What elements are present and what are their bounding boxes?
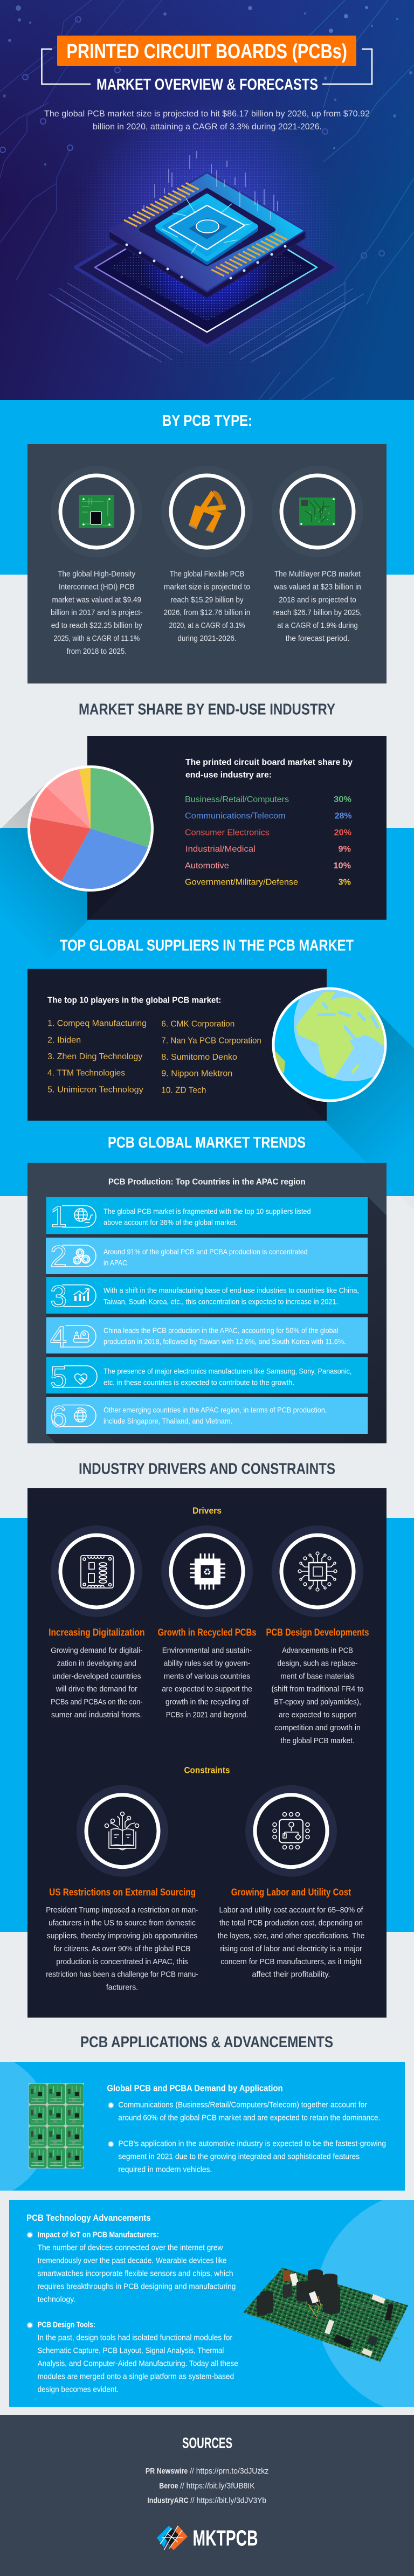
intro text: The global PCB market size is projected to hit $86.17 billion by 2026, up from $70.92	[44, 109, 370, 119]
trend row 1: 1	[50, 1199, 67, 1233]
legend table: Industrial/Medical	[185, 845, 256, 854]
driver: digitalization: under-developed countries	[52, 1672, 141, 1681]
driver: design developments	[266, 1525, 369, 1745]
panel: market share	[87, 736, 387, 920]
column: multilayer PCB: the forecast period.	[286, 634, 349, 643]
icon: circuit book	[105, 1812, 139, 1850]
page background sections	[0, 400, 414, 2415]
legend table: 9%	[339, 845, 351, 854]
legend table	[185, 795, 351, 887]
subtitle: MARKET OVERVIEW & FORECASTS	[96, 75, 318, 94]
constraint: US restrictions: suppliers, thereby improving job opportunities	[47, 1931, 197, 1940]
legend table: Automotive	[185, 861, 229, 871]
intro text	[44, 109, 370, 132]
legend table: 10%	[334, 861, 351, 871]
chip illustration	[49, 103, 364, 376]
driver: digitalization: Increasing Digitalization	[49, 1627, 144, 1638]
bullet 2: PCB's application in the automotive industry is expected to be the fastest-growing	[118, 2139, 386, 2149]
driver: recycled PCBs: ability rules set by govern-	[164, 1659, 250, 1668]
driver: design developments: competition and growth in	[274, 1723, 361, 1732]
supplier list: 8. Sumitomo Denko	[161, 1053, 237, 1062]
driver: digitalization: sumer and industrial fronts.	[51, 1710, 142, 1719]
source list: // https://bit.ly/3dJV3Yb	[190, 2496, 266, 2505]
source list: IndustryARC	[147, 2496, 189, 2505]
trend row 2: Around 91% of the global PCB and PCBA production is concentrated	[104, 1247, 308, 1256]
bullet 2: segment in 2021 due to the growing integrated and sophisticated features	[118, 2152, 360, 2161]
constraint: labor and utility cost: the layers, size, and other specifications. The	[218, 1931, 364, 1940]
driver: recycled PCBs: are expected to support the	[162, 1684, 252, 1694]
panel: top suppliers	[27, 969, 327, 1121]
bullet: IoT impact	[26, 2230, 236, 2304]
trend row 3	[46, 1277, 368, 1314]
icon: rotating globe	[74, 1408, 86, 1422]
supplier list: 1. Compeq Manufacturing	[47, 1019, 147, 1028]
icon: globe and cart	[74, 1208, 93, 1223]
constraint: labor and utility cost: concern for PCB manufacturers, as it might	[220, 1957, 362, 1966]
constraint: labor and utility cost	[218, 1785, 364, 1979]
logo: MKTPCB	[193, 2526, 258, 2551]
constraint: US restrictions: production is concentrated in APAC, this	[56, 1957, 188, 1966]
bullet: IoT impact: technology.	[38, 2295, 75, 2304]
driver: recycled PCBs: ments of various countries	[164, 1672, 250, 1681]
bullet: IoT impact: tremendously over the past decade. Wearable devices like	[38, 2256, 227, 2265]
driver: recycled PCBs: Growth in Recycled PCBs	[157, 1627, 257, 1638]
driver: design developments: (shift from traditional FR4 to	[272, 1684, 363, 1694]
driver: digitalization: PCBs and PCBAs on the con-	[51, 1697, 142, 1707]
bullet: IoT impact: The number of devices connected over the internet grew	[38, 2243, 223, 2252]
bullet: IoT impact: requires breakthroughs in PCB designing and manufacturing	[38, 2282, 236, 2291]
supplier list: 5. Unimicron Technology	[47, 1085, 143, 1094]
pie long shadow	[0, 784, 135, 981]
trend row 1: above account for 36% of the global market.	[104, 1218, 238, 1227]
column: HDI PCB	[51, 466, 142, 656]
constraint: US restrictions	[46, 1785, 198, 1992]
trend row 4: production in 2018, followed by Taiwan with 12.6%, and South Korea with 11.6%.	[104, 1337, 346, 1346]
legend table: Communications/Telecom	[185, 812, 286, 821]
icon: growth chart	[74, 1289, 89, 1301]
driver: design developments: the global PCB market.	[280, 1736, 355, 1745]
icon: recycled chip	[190, 1553, 225, 1590]
trend row 4: 4	[50, 1320, 67, 1353]
driver: digitalization: zation in developing and	[57, 1659, 136, 1668]
constraint: US restrictions: President Trump imposed a restriction on man-	[46, 1905, 198, 1915]
driver: recycled PCBs: Environmental and sustain-	[162, 1646, 252, 1655]
column: flexible PCB: The global Flexible PCB	[170, 569, 244, 579]
trend row 2	[46, 1238, 368, 1274]
trend row 4: China leads the PCB production in the APAC, accounting for 50% of the global	[104, 1326, 338, 1335]
legend table: Business/Retail/Computers	[185, 795, 289, 804]
supplier list: 7. Nan Ya PCB Corporation	[161, 1036, 261, 1045]
panel: PCB types	[27, 444, 387, 683]
legend table: 30%	[334, 795, 351, 804]
icon: circuit board	[81, 1556, 113, 1588]
constraint: US restrictions: for citizens. As over 90% of the global PCB	[54, 1944, 190, 1953]
source list: PR Newswire	[146, 2467, 188, 2476]
trend row 6: Other emerging countries in the APAC region, in terms of PCB production,	[104, 1406, 327, 1414]
column: flexible PCB: 2026, from $12.76 billion in	[164, 608, 250, 617]
title bracket	[42, 49, 372, 84]
trend row 5	[46, 1357, 368, 1394]
icon: flexible board	[189, 491, 226, 533]
column: flexible PCB	[161, 466, 253, 643]
driver: digitalization: will drive the demand for	[56, 1684, 137, 1694]
supplier list: 3. Zhen Ding Technology	[47, 1052, 142, 1061]
trend row 5: 5	[50, 1360, 67, 1394]
sources heading: SOURCES	[182, 2435, 232, 2451]
bullet: design tools	[26, 2321, 238, 2394]
column: flexible PCB: reach $15.29 billion by	[170, 595, 244, 604]
legend table: Government/Military/Defense	[185, 878, 298, 887]
logo	[157, 2525, 258, 2551]
supplier list: 4. TTM Technologies	[47, 1069, 125, 1078]
bullet 1	[108, 2101, 380, 2123]
trend row 5: etc. in these countries is expected to contribute to the growth.	[104, 1378, 294, 1386]
column: flexible PCB: during 2021-2026.	[177, 634, 237, 643]
legend table: Consumer Electronics	[185, 828, 270, 837]
card: technology advancements	[9, 2191, 414, 2416]
supplier list: 10. ZD Tech	[161, 1086, 206, 1095]
driver: recycled PCBs: PCBs in 2021 and beyond.	[166, 1710, 248, 1719]
heading: market share: MARKET SHARE BY END-USE INDUSTRY	[79, 701, 335, 719]
heading: market trends: PCB GLOBAL MARKET TRENDS	[108, 1134, 306, 1151]
bullet 2	[108, 2139, 386, 2174]
driver: recycled PCBs: growth in the recycling of	[165, 1697, 249, 1707]
trend row 1	[46, 1197, 368, 1234]
constraint: labor and utility cost: Growing Labor and Utility Cost	[231, 1887, 351, 1897]
image: assembled PCB	[243, 2268, 408, 2362]
icon: chip with flowchart	[273, 1812, 309, 1849]
column: multilayer PCB: at a CAGR of 1.9% during	[277, 621, 358, 630]
column: multilayer PCB	[272, 466, 363, 643]
column: HDI PCB: ed to reach $22.25 billion by	[51, 621, 142, 630]
icon: multilayer board	[299, 498, 335, 526]
source list: // https://bit.ly/3fUB8IK	[180, 2481, 255, 2490]
bullet 1: Communications (Business/Retail/Computers/Telecom) together account for	[118, 2101, 367, 2110]
icon: processor traces	[298, 1552, 337, 1591]
legend table: 28%	[335, 812, 351, 821]
bullet: design tools: In the past, design tools had isolated functional modules for	[38, 2333, 232, 2342]
heading: drivers and constraints: INDUSTRY DRIVERS AND CONSTRAINTS	[79, 1461, 335, 1478]
trend row 5: The presence of major electronics manufacturers like Samsung, Sony, Panasonic,	[104, 1366, 351, 1375]
globe long shadow	[289, 1004, 414, 1220]
trend row 1: The global PCB market is fragmented with the top 10 suppliers listed	[104, 1207, 310, 1216]
bullet: design tools: modules are merged onto a single platform as system-based	[38, 2372, 234, 2381]
source list: Beroe	[159, 2481, 178, 2490]
column: flexible PCB: 2020, at a CAGR of 3.1%	[169, 621, 245, 630]
trend row 4	[46, 1317, 368, 1353]
icon: conveyor factory	[73, 1331, 89, 1342]
constraints heading: Constraints	[184, 1765, 230, 1775]
trend row 2: in APAC.	[104, 1258, 129, 1267]
constraint: labor and utility cost: rising cost of labor and electricity is a major	[220, 1944, 362, 1953]
constraint: labor and utility cost: affect their profitability.	[252, 1970, 330, 1979]
heading: applications and advancements: PCB APPLICATIONS & ADVANCEMENTS	[80, 2034, 333, 2051]
panel heading: PCB Production: Top Countries in the APAC region	[108, 1177, 306, 1187]
column: multilayer PCB: The Multilayer PCB market	[274, 569, 361, 579]
legend table: 3%	[339, 878, 351, 887]
card: demand by application	[0, 2062, 405, 2191]
title banner: PRINTED CIRCUIT BOARDS (PCBs)	[66, 40, 347, 63]
column: HDI PCB: 2025, with a CAGR of 11.1%	[53, 634, 140, 643]
bullet: design tools: design becomes evident.	[38, 2385, 119, 2394]
constraint: labor and utility cost: the total PCB production cost, depending on	[219, 1918, 363, 1928]
card: technology advancements: PCB Technology Advancements	[26, 2213, 151, 2223]
panel heading: The printed circuit board market share by	[185, 758, 353, 767]
intro text: billion in 2020, attaining a CAGR of 3.3% during 2021-2026.	[93, 122, 322, 132]
driver: design developments: are expected to support	[279, 1710, 357, 1719]
panel heading	[185, 758, 353, 779]
trend row 3: With a shift in the manufacturing base of end-use industries to countries like China,	[104, 1286, 359, 1295]
bullet: design tools: Analysis, and Computer-Aided Manufacturing. Today all these	[38, 2359, 238, 2368]
icon: handshake heart	[75, 1374, 87, 1384]
drivers heading: Drivers	[192, 1505, 222, 1516]
column: HDI PCB: market was valued at $9.49	[52, 595, 141, 604]
driver: digitalization	[49, 1525, 144, 1719]
panel heading: The top 10 players in the global PCB market:	[47, 996, 221, 1005]
panel: drivers and constraints	[27, 1488, 387, 2018]
driver: design developments: BT-epoxy and polyamides),	[274, 1697, 361, 1707]
constraint: US restrictions: ufacturers in the US to source from domestic	[49, 1918, 196, 1928]
hero background	[0, 0, 414, 400]
column: multilayer PCB: was valued at $23 billion in	[273, 582, 361, 591]
bullet: IoT impact: Impact of IoT on PCB Manufacturers:	[38, 2230, 159, 2239]
card: demand by application: Global PCB and PCBA Demand by Application	[107, 2083, 283, 2093]
driver: design developments: design, such as replace-	[278, 1659, 357, 1668]
supplier list: 9. Nippon Mektron	[161, 1069, 232, 1079]
source list: // https://prn.to/3dJUzkz	[190, 2467, 268, 2476]
column: HDI PCB: from 2018 to 2025.	[67, 647, 127, 656]
trend row 3: Taiwan, South Korea, etc., this concentration is expected to increase in 2021.	[104, 1297, 338, 1306]
bullet 2: required in modern vehicles.	[118, 2165, 212, 2174]
column: HDI PCB: The global High-Density	[58, 569, 136, 579]
driver: digitalization: Growing demand for digitali-	[51, 1646, 142, 1655]
pie chart	[27, 765, 154, 892]
constraint: labor and utility cost: Labor and utility cost account for 65–80% of	[219, 1905, 363, 1915]
bullet: design tools: Schematic Capture, PCB Layout, Signal Analysis, Thermal	[38, 2346, 224, 2355]
panel: market trends	[27, 1163, 387, 1444]
trend row 6	[46, 1397, 368, 1434]
driver: design developments: ment of base materials	[280, 1672, 355, 1681]
globe	[272, 987, 387, 1102]
icon: gears	[73, 1249, 89, 1263]
heading: top suppliers: TOP GLOBAL SUPPLIERS IN THE PCB MARKET	[60, 937, 354, 955]
driver: design developments: PCB Design Developments	[266, 1627, 369, 1638]
source list	[146, 2467, 268, 2505]
heading: by PCB type: BY PCB TYPE:	[162, 412, 252, 430]
constraint: US restrictions: facturers.	[106, 1983, 138, 1992]
column: flexible PCB: market size is projected to	[164, 582, 250, 591]
bullet: design tools: PCB Design Tools:	[38, 2321, 95, 2330]
driver: design developments: Advancements in PCB	[282, 1646, 353, 1655]
icon: HDI board	[79, 495, 114, 528]
bullet 1: around 60% of the global PCB market and are expected to retain the dominance.	[118, 2114, 380, 2123]
supplier list	[47, 1019, 261, 1095]
title banner	[57, 36, 356, 66]
column: HDI PCB: Interconnect (HDI) PCB	[59, 582, 135, 591]
trend row 6: 6	[50, 1399, 67, 1433]
image: PCB panel	[29, 2083, 84, 2168]
constraint: US restrictions: US Restrictions on External Sourcing	[49, 1887, 196, 1897]
icon: recycled chip: ♻	[203, 1567, 211, 1578]
bullet: IoT impact: smartwatches incorporate flexible sensors and chips, which	[38, 2269, 233, 2278]
supplier list: 2. Ibiden	[47, 1035, 81, 1045]
legend table: 20%	[334, 828, 351, 837]
supplier list: 6. CMK Corporation	[161, 1020, 234, 1029]
trend row 6: include Singapore, Thailand, and Vietnam.	[104, 1417, 232, 1425]
trend row 2: 2	[50, 1239, 67, 1273]
column: multilayer PCB: reach $26.7 billion by 2025,	[273, 608, 362, 617]
constraint: US restrictions: restriction has been a challenge for PCB manu-	[46, 1970, 198, 1979]
column: HDI PCB: billion in 2017 and is project-	[51, 608, 142, 617]
column: multilayer PCB: 2018 and is projected to	[279, 595, 356, 604]
driver: recycled PCBs	[157, 1525, 257, 1719]
footer	[0, 2415, 414, 2576]
panel heading: end-use industry are:	[185, 770, 272, 779]
trend row 3: 3	[50, 1279, 67, 1313]
